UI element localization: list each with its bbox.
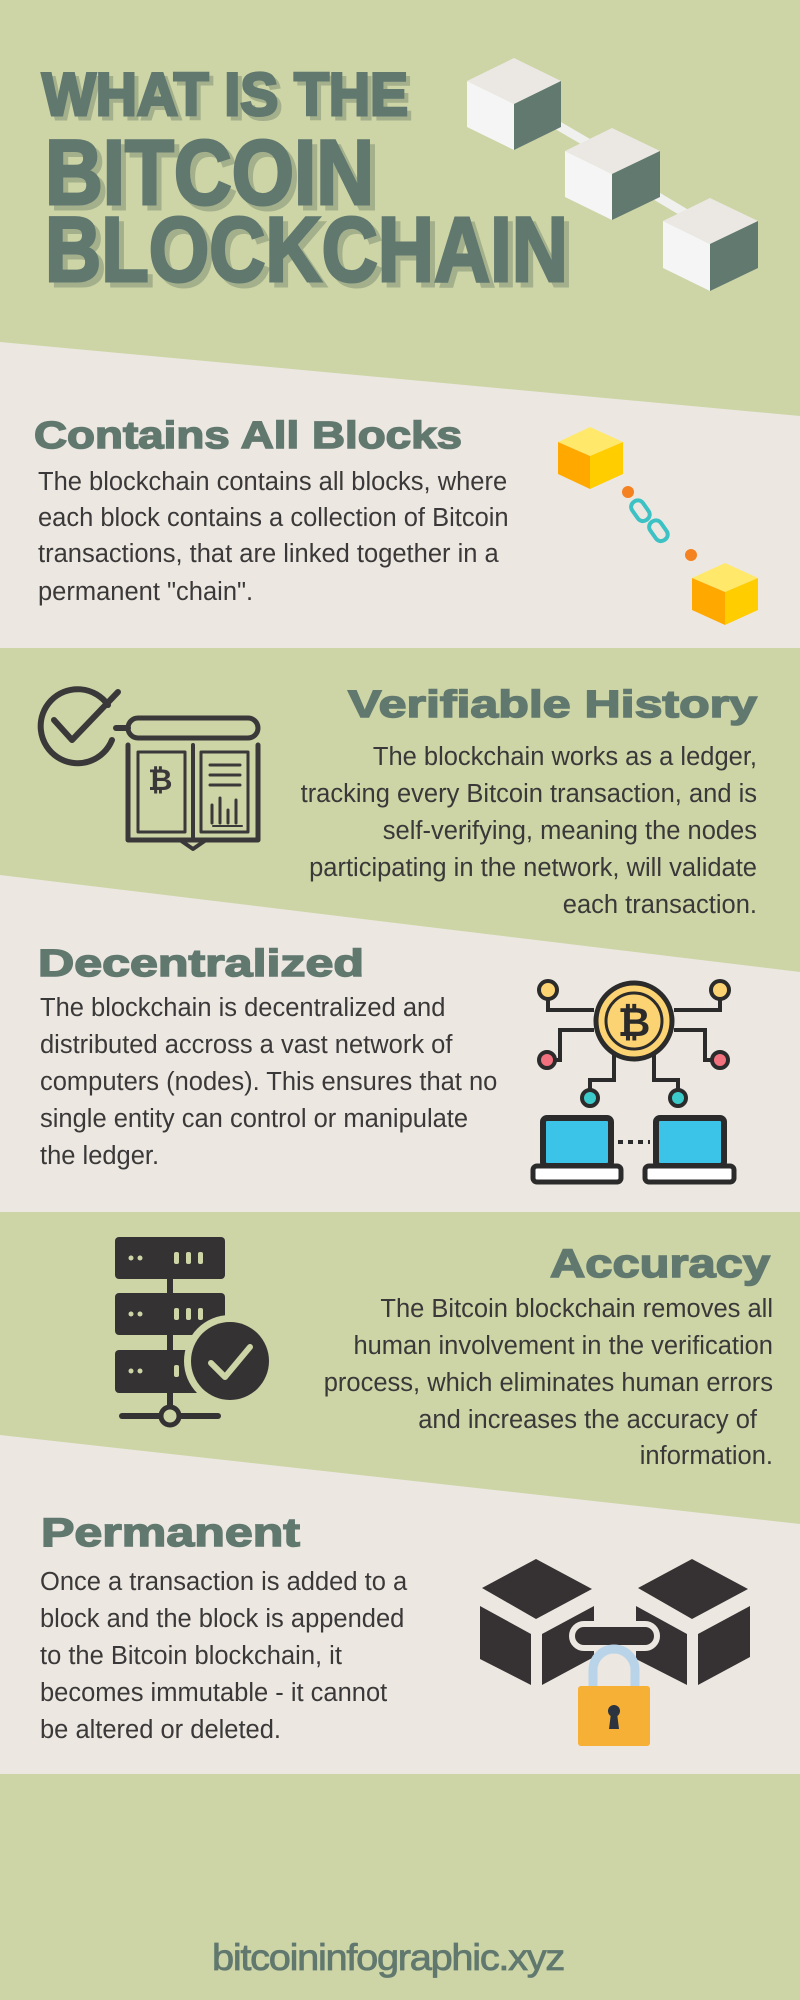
text: verifiable history: each transaction. bbox=[563, 891, 757, 919]
icon: yellow blocks chain bbox=[558, 427, 758, 625]
heading: verifiable history: Verifiable History bbox=[348, 684, 757, 726]
text: decentralized: computers (nodes). This ensures that no bbox=[40, 1068, 497, 1096]
text: permanent: becomes immutable - it cannot bbox=[40, 1679, 387, 1707]
text: accuracy: process, which eliminates human errors bbox=[324, 1369, 773, 1397]
text: decentralized: distributed accross a vast network of bbox=[40, 1031, 453, 1059]
text: accuracy: human involvement in the verification bbox=[353, 1332, 773, 1360]
title: BITCOIN bbox=[45, 122, 374, 224]
heading: decentralized: Decentralized bbox=[38, 943, 364, 985]
heading: accuracy: Accuracy bbox=[550, 1242, 771, 1286]
title: BLOCKCHAIN bbox=[45, 199, 568, 301]
text: contains all blocks: The blockchain contains all blocks, where bbox=[38, 468, 507, 496]
text: decentralized: The blockchain is decentralized and bbox=[40, 994, 445, 1022]
text: verifiable history: tracking every Bitcoin transaction, and is bbox=[301, 780, 757, 808]
heading: permanent: Permanent bbox=[41, 1511, 300, 1555]
panel: verifiable history bbox=[41, 684, 757, 919]
text: contains all blocks: each block contains a collection of Bitcoin bbox=[38, 504, 509, 532]
text: permanent: be altered or deleted. bbox=[40, 1716, 281, 1744]
text: contains all blocks bbox=[38, 468, 509, 606]
text: accuracy: The Bitcoin blockchain removes all bbox=[380, 1295, 773, 1323]
icon: check and ledger book bbox=[41, 689, 258, 849]
text: verifiable history bbox=[301, 743, 757, 919]
title: BLOCKCHAIN bbox=[50, 204, 573, 306]
text: permanent bbox=[40, 1568, 408, 1744]
text: decentralized: single entity can control or manipulate bbox=[40, 1105, 468, 1133]
icon: bitcoin network bbox=[533, 981, 734, 1182]
text: decentralized: the ledger. bbox=[40, 1142, 159, 1170]
icon: header block chain bbox=[467, 58, 758, 291]
panel: accuracy bbox=[115, 1237, 773, 1470]
text: verifiable history: participating in the network, will validate bbox=[309, 854, 757, 882]
text: permanent: to the Bitcoin blockchain, it bbox=[40, 1642, 342, 1670]
icon: check and ledger book: ₿ bbox=[148, 764, 172, 797]
text: contains all blocks: permanent "chain". bbox=[38, 578, 253, 606]
title: WHAT IS THE bbox=[42, 61, 408, 128]
panel: contains all blocks bbox=[34, 415, 758, 625]
text: verifiable history: The blockchain works as a ledger, bbox=[373, 743, 757, 771]
panel: decentralized bbox=[38, 943, 734, 1182]
heading: contains all blocks: Contains All Blocks bbox=[34, 415, 462, 457]
text: verifiable history: self-verifying, meaning the nodes bbox=[383, 817, 757, 845]
icon: server with check bbox=[115, 1237, 276, 1425]
text: accuracy: and increases the accuracy of bbox=[418, 1406, 758, 1434]
text: contains all blocks: transactions, that are linked together in a bbox=[38, 540, 500, 568]
text: permanent: Once a transaction is added to a bbox=[40, 1568, 408, 1596]
footer: website: bitcoininfographic.xyz bbox=[212, 1937, 564, 1978]
title: WHAT IS THE bbox=[46, 65, 412, 132]
title bbox=[42, 61, 573, 306]
text: accuracy bbox=[324, 1295, 773, 1470]
icon: bitcoin network: ₿ bbox=[618, 1001, 650, 1045]
title: BITCOIN bbox=[50, 127, 379, 229]
icon: locked blocks bbox=[480, 1559, 750, 1746]
panel: permanent bbox=[40, 1511, 750, 1746]
text: decentralized bbox=[40, 994, 497, 1170]
text: accuracy: information. bbox=[640, 1442, 773, 1470]
text: permanent: block and the block is appended bbox=[40, 1605, 404, 1633]
